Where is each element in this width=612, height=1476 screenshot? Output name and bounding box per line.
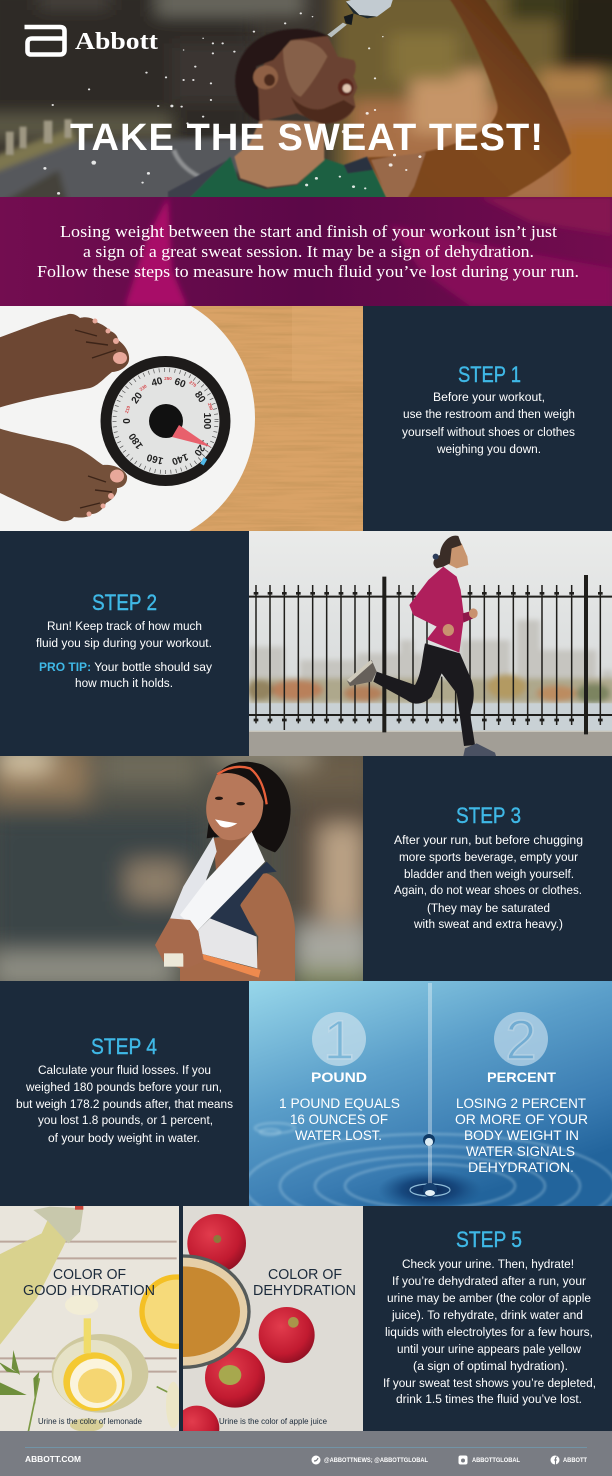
- panel: step 4: [16, 981, 612, 1206]
- text panel: step 2: fluid you sip during your workout.: [36, 636, 212, 650]
- shirt: [168, 162, 226, 197]
- fact: one pound: 1 POUND EQUALS: [279, 1095, 400, 1111]
- text panel: step 1: STEP 1: [458, 362, 521, 387]
- text panel: step 5: (a sign of optimal hydration).: [413, 1359, 568, 1373]
- intro text: a sign of a great sweat session. It may be a sign of dehydration.: [83, 242, 534, 261]
- text panel: step 5: Check your urine. Then, hydrate!: [402, 1257, 574, 1271]
- panel: step 1: [0, 306, 574, 531]
- dial numbers: 40: [150, 376, 164, 389]
- fact: one pound: WATER LOST.: [295, 1127, 382, 1143]
- dial numbers: 250: [164, 376, 172, 381]
- label: good hydration: Urine is the color of lemonade: [38, 1416, 142, 1426]
- intro text: Follow these steps to measure how much fluid you’ve lost during your run.: [37, 262, 579, 281]
- feet: [0, 314, 129, 408]
- fact: two percent: WATER SIGNALS: [466, 1143, 575, 1159]
- lemon half: [139, 1274, 214, 1349]
- photo: smiling woman with towel: [0, 756, 363, 981]
- water drops: [43, 12, 421, 195]
- text panel: step 3: STEP 3: [456, 803, 521, 828]
- text panel: step 4: of your body weight in water.: [48, 1131, 200, 1145]
- text panel: step 5: urine may be amber (the color of apple: [387, 1291, 591, 1305]
- text panel: step 3: bladder and then weigh yourself.: [404, 867, 574, 881]
- panel: step 3: [0, 756, 582, 981]
- label: good hydration: COLOR OF: [53, 1267, 126, 1283]
- fact: two percent: PERCENT: [487, 1069, 556, 1085]
- text panel: step 2: STEP 2: [92, 590, 157, 615]
- ear: [253, 65, 278, 89]
- label: dehydration: DEHYDRATION: [253, 1283, 356, 1299]
- droplets: [423, 1134, 437, 1197]
- label: dehydration: [219, 1267, 356, 1426]
- text panel: step 2: PRO TIP: Your bottle should say: [39, 660, 213, 674]
- social: instagram: [458, 1456, 520, 1464]
- text panel: step 5: juice). To rehydrate, drink water and: [391, 1308, 583, 1322]
- text panel: step 2: [0, 531, 249, 756]
- text panel: step 3: with sweat and extra heavy.): [413, 917, 563, 931]
- website: ABBOTT.COM: [25, 1454, 81, 1464]
- head: [253, 34, 357, 124]
- social: facebook: [550, 1456, 587, 1465]
- fence: [249, 575, 612, 734]
- Abbott logo: Abbott: [75, 29, 158, 55]
- face: [206, 773, 263, 840]
- dial numbers: 270: [188, 380, 198, 388]
- photo: feet on bathroom scale: [0, 306, 363, 531]
- dial numbers: 210: [124, 405, 131, 414]
- text panel: step 2: how much it holds.: [75, 676, 173, 690]
- runner: [373, 643, 475, 746]
- text panel: step 3: [363, 756, 612, 981]
- text panel: step 5: If you’re dehydrated after a run, your: [392, 1274, 586, 1288]
- photo: woman running by iron fence: [247, 531, 612, 757]
- photo: lemonade, colour of good hydration: [0, 1206, 214, 1432]
- text panel: step 1: use the restroom and then weigh: [403, 407, 575, 421]
- dial numbers: 160: [145, 451, 165, 466]
- text panel: step 5: If your sweat test shows you’re depleted,: [383, 1376, 596, 1390]
- fact: two percent: DEHYDRATION.: [468, 1159, 574, 1175]
- text panel: step 3: After your run, but before chugging: [394, 833, 583, 847]
- dial numbers: 230: [139, 383, 148, 392]
- water droplet photo with facts: [249, 981, 612, 1206]
- social: facebook: ABBOTT: [563, 1458, 587, 1464]
- icon: number 1 badge: [312, 1012, 366, 1066]
- dial numbers: 20: [130, 390, 145, 406]
- text panel: step 3: (They may be saturated: [427, 901, 550, 915]
- bottle: [346, 0, 394, 17]
- text panel: step 1: [363, 306, 612, 531]
- falling stream divider: [428, 983, 432, 1188]
- guard rail posts: [6, 119, 71, 155]
- dial numbers: 120: [191, 438, 210, 458]
- social: twitter: @ABBOTTNEWS; @ABBOTTGLOBAL: [324, 1458, 428, 1464]
- dial numbers: 0: [122, 418, 133, 424]
- icon: number 1 badge: 1: [323, 1008, 355, 1071]
- text panel: step 4: weighed 180 pounds before your run,: [25, 1080, 222, 1094]
- text panel: step 5: until your urine appears pale yellow: [397, 1342, 581, 1356]
- fact: one pound: 16 OUNCES OF: [290, 1111, 388, 1127]
- fact: one pound: [279, 1069, 400, 1143]
- text panel: step 4: [0, 981, 249, 1206]
- text panel: step 4: STEP 4: [91, 1034, 157, 1059]
- text panel: step 1: yourself without shoes or clothes: [402, 425, 575, 439]
- text panel: step 2: Run! Keep track of how much: [47, 619, 202, 633]
- sports top: [210, 862, 277, 937]
- dial numbers: 180: [127, 430, 146, 451]
- social: twitter: [312, 1456, 428, 1464]
- fact: two percent: OR MORE OF YOUR: [455, 1111, 588, 1127]
- fact: two percent: [455, 1069, 588, 1175]
- fact: one pound: POUND: [311, 1069, 367, 1085]
- intro text: Losing weight between the start and finish of your workout isn’t just: [60, 222, 557, 241]
- text panel: step 4: you lost 1.8 pounds, or 1 percent,: [38, 1113, 213, 1127]
- icon: number 2 badge: [494, 1012, 548, 1066]
- ripples: [249, 1121, 612, 1206]
- hand: [155, 918, 204, 969]
- text panel: step 1: weighing you down.: [436, 442, 541, 456]
- footer: [0, 1431, 612, 1476]
- bottle: [0, 1218, 72, 1347]
- label: dehydration: Urine is the color of apple juice: [219, 1416, 327, 1426]
- mason jar: [52, 1334, 148, 1413]
- hair: [235, 29, 328, 122]
- skyline: [249, 618, 612, 680]
- text panel: step 1: Before your workout,: [433, 390, 545, 404]
- text panel: step 5: drink 1.5 times the fluid you’ve lost.: [396, 1392, 582, 1406]
- text panel: step 5: [363, 1206, 612, 1431]
- text panel: step 4: but weigh 178.2 pounds after, that means: [16, 1097, 233, 1111]
- juice glass: [116, 1254, 251, 1369]
- dial numbers: 290: [207, 402, 214, 411]
- hair: [207, 762, 291, 852]
- text panel: step 3: Again, do not wear shoes or clothes.: [394, 883, 582, 897]
- raised arm: [367, 0, 571, 200]
- icon: number 2 badge: 2: [505, 1008, 537, 1071]
- dial numbers: 80: [192, 390, 208, 405]
- dial numbers: [122, 376, 214, 467]
- text panel: step 4: Calculate your fluid losses. If you: [38, 1063, 211, 1077]
- headband: [217, 767, 267, 804]
- mouth: [338, 79, 354, 96]
- social: instagram: ABBOTTGLOBAL: [472, 1458, 520, 1464]
- label: dehydration: COLOR OF: [268, 1267, 342, 1283]
- apples: [187, 1214, 246, 1273]
- elderflower: [65, 1295, 98, 1315]
- intro text: [37, 222, 579, 281]
- panel: step 5: [0, 1206, 612, 1451]
- Abbott logo: [24, 27, 158, 55]
- dial numbers: 100: [201, 413, 212, 430]
- autumn trees: [247, 675, 612, 703]
- title: TAKE THE SWEAT TEST!: [70, 117, 543, 159]
- towel: [170, 836, 217, 920]
- text panel: step 5: STEP 5: [456, 1227, 522, 1252]
- panel: step 2: [0, 531, 612, 757]
- label: good hydration: GOOD HYDRATION: [23, 1283, 155, 1299]
- neck: [234, 120, 324, 187]
- fact: two percent: BODY WEIGHT IN: [464, 1127, 579, 1143]
- dial numbers: 140: [170, 451, 190, 467]
- leaves: [0, 1350, 39, 1405]
- intro band: [0, 197, 612, 306]
- fact: two percent: LOSING 2 PERCENT: [456, 1095, 586, 1111]
- text panel: step 5: liquids with electrolytes for a few hours,: [385, 1325, 593, 1339]
- label: good hydration: [23, 1267, 155, 1426]
- hero photo: runner pouring water over his head: [0, 0, 612, 213]
- photo: apple juice, colour of dehydration: [116, 1206, 363, 1451]
- body: [180, 873, 295, 983]
- dial numbers: 60: [173, 376, 187, 391]
- text panel: step 3: more sports beverage, empty your: [399, 850, 578, 864]
